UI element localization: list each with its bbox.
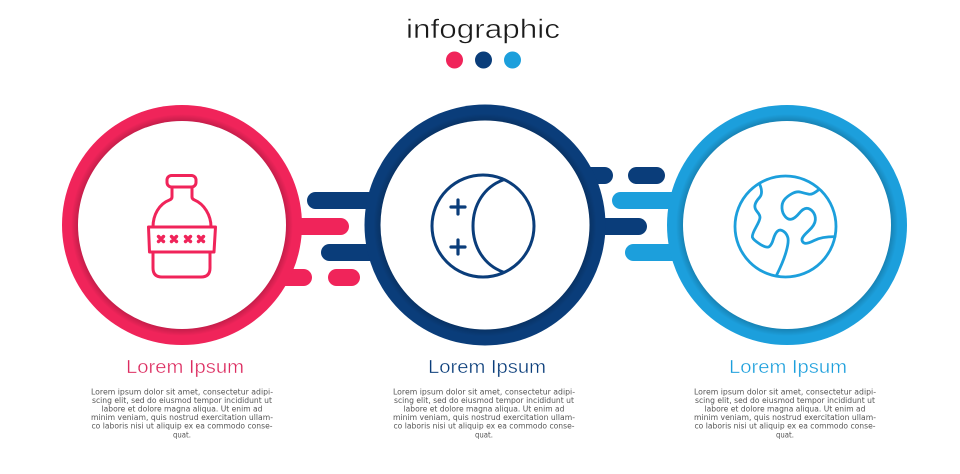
icon: globe bbox=[735, 176, 836, 277]
heading: column 2: Lorem Ipsum bbox=[428, 357, 546, 377]
heading: column 3: Lorem Ipsum bbox=[729, 357, 847, 377]
connector bars: navy bbox=[307, 167, 665, 261]
body text: column 3: quat. bbox=[776, 430, 794, 440]
body text: column 1: co laboris nisi ut aliquip ex ea commodo conse- bbox=[92, 422, 273, 430]
body text: column 3: co laboris nisi ut aliquip ex ea commodo conse- bbox=[694, 422, 876, 430]
body text: column 2 bbox=[393, 388, 575, 440]
ring: red bbox=[62, 105, 302, 345]
body text: column 1: scing elit, sed do eiusmod tempor incididunt ut bbox=[92, 396, 272, 405]
body text: column 1: minim veniam, quis nostrud exercitation ullam- bbox=[91, 413, 273, 422]
body text: column 1: Lorem ipsum dolor sit amet, consectetur adipi- bbox=[91, 388, 273, 396]
body text: column 3: labore et dolore magna aliqua. Ut enim ad bbox=[704, 404, 866, 414]
body text: column 2: Lorem ipsum dolor sit amet, consectetur adipi- bbox=[393, 388, 575, 396]
body text: column 2: quat. bbox=[475, 430, 493, 440]
body text: column 2: labore et dolore magna aliqua. Ut enim ad bbox=[404, 404, 565, 414]
icon: bottle bbox=[148, 176, 216, 277]
ring: light blue bbox=[667, 105, 907, 345]
legend dots bbox=[446, 52, 521, 68]
body text: column 1: labore et dolore magna aliqua. Ut enim ad bbox=[102, 404, 263, 414]
body text: column 1: quat. bbox=[173, 430, 191, 440]
body text: column 3: Lorem ipsum dolor sit amet, consectetur adipi- bbox=[694, 388, 876, 396]
body text: column 3: minim veniam, quis nostrud exercitation ullam- bbox=[694, 413, 876, 422]
title: infographic bbox=[406, 14, 560, 44]
body text: column 3 bbox=[694, 388, 876, 440]
body text: column 1 bbox=[91, 388, 273, 440]
body text: column 3: scing elit, sed do eiusmod tempor incididunt ut bbox=[695, 396, 875, 405]
icon: moon bbox=[432, 175, 534, 277]
body text: column 2: co laboris nisi ut aliquip ex ea commodo conse- bbox=[394, 422, 575, 430]
connector bars: red bbox=[270, 218, 360, 286]
body text: column 2: scing elit, sed do eiusmod tempor incididunt ut bbox=[394, 396, 574, 405]
connector bars: light blue bbox=[612, 192, 687, 261]
heading: column 1: Lorem Ipsum bbox=[126, 357, 244, 377]
body text: column 2: minim veniam, quis nostrud exercitation ullam- bbox=[393, 413, 575, 422]
ring: navy bbox=[364, 104, 606, 346]
